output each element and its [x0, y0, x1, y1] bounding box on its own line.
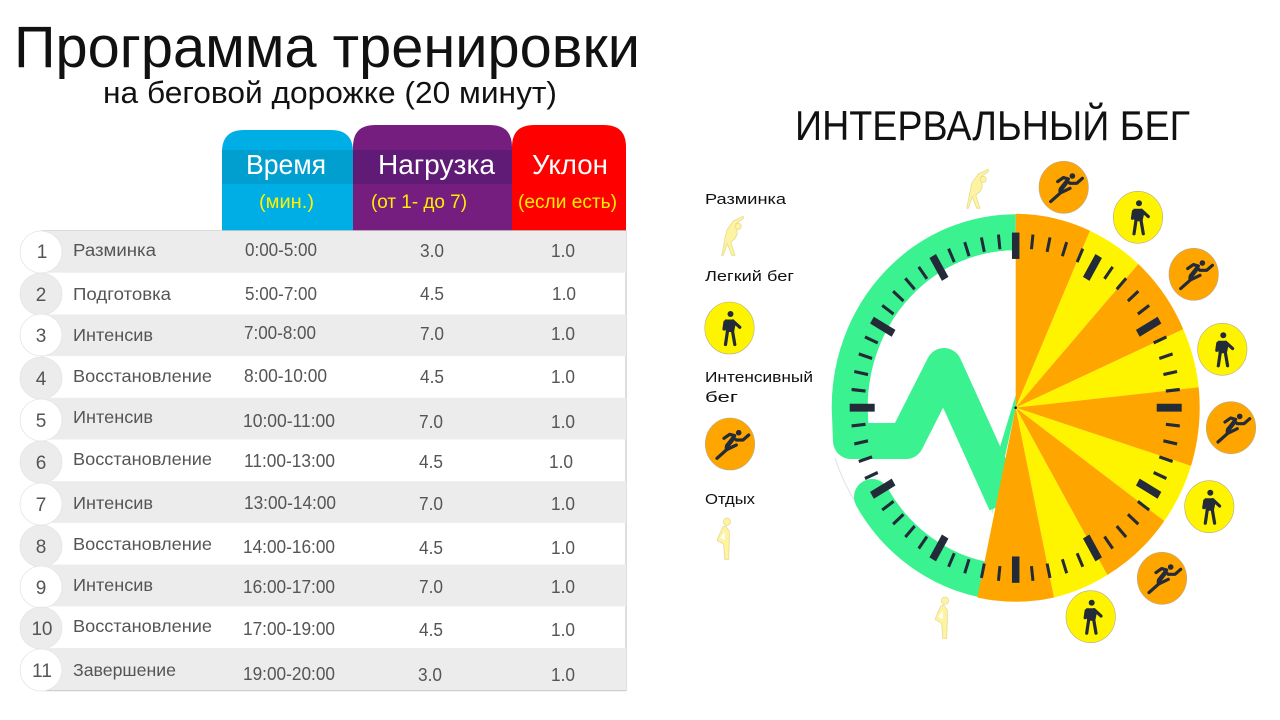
table: training program [20, 125, 626, 691]
row 8: 1.0 [551, 538, 575, 558]
legend: easy run: Легкий бег [705, 268, 795, 285]
row 8: 8 [36, 537, 46, 558]
row 7: 1.0 [551, 494, 575, 514]
row 3: Интенсив [73, 325, 153, 345]
row 9: 7.0 [419, 577, 443, 597]
column header: time: Время [246, 149, 326, 180]
row 8: 14:00-16:00 [243, 537, 335, 557]
row 4: 4.5 [420, 367, 444, 387]
row 10: 10 [32, 619, 52, 640]
column header: time [222, 130, 353, 231]
row 2: 2 [36, 285, 46, 306]
icon: rest figure [935, 597, 949, 638]
column header: load [353, 125, 512, 231]
row 6: 11:00-13:00 [244, 451, 335, 471]
row 1: Разминка [73, 240, 156, 260]
icon: easy run 2 [1198, 323, 1247, 375]
row 6: 4.5 [419, 452, 443, 472]
row 3: 3 [36, 326, 46, 347]
column header: time: (мин.) [259, 192, 314, 213]
row 11: Завершение [73, 660, 176, 680]
row 7: 13:00-14:00 [244, 493, 336, 513]
clock chart [835, 214, 1200, 602]
row 7: 7 [36, 495, 46, 516]
legend: rest [705, 491, 756, 559]
dial centre [1014, 406, 1017, 409]
row 8: 4.5 [419, 538, 443, 558]
legend: warm-up: Разминка [705, 191, 787, 208]
row 11: 19:00-20:00 [243, 664, 335, 684]
row 2: 5:00-7:00 [245, 284, 317, 304]
row 5: 5 [36, 411, 46, 432]
row 9: 16:00-17:00 [243, 577, 335, 597]
row 4 [20, 357, 575, 399]
row 5: 1.0 [551, 412, 575, 432]
icon: easy run 3 [1185, 481, 1234, 533]
row 4: 1.0 [551, 367, 575, 387]
dial wedges [977, 214, 1200, 602]
icon: intensive run 3 [1206, 402, 1256, 454]
row 9: 9 [36, 578, 46, 599]
row 2 [20, 273, 576, 315]
row 9 [20, 565, 626, 608]
column header: load: Нагрузка [378, 149, 496, 180]
row 7: Интенсив [73, 493, 153, 513]
row 2: Подготовка [73, 284, 171, 304]
row 10 [20, 607, 575, 649]
row 5: 7.0 [419, 412, 443, 432]
icon: easy run 4 [1066, 591, 1115, 643]
green warm-up and rest track [850, 232, 1016, 582]
legend: intensive run [705, 369, 813, 470]
row 10: 17:00-19:00 [243, 619, 335, 639]
icon: intensive run 2 [1169, 248, 1218, 300]
legend [705, 191, 813, 559]
heading: interval running: ИНТЕРВАЛЬНЫЙ БЕГ [795, 101, 1190, 149]
row 1 [20, 231, 626, 273]
row 4: Восстановление [73, 366, 212, 386]
column header: incline: (если есть) [518, 192, 617, 213]
row 7: 7.0 [419, 494, 443, 514]
icon: intensive run 1 [1039, 161, 1088, 213]
legend: rest: Отдых [705, 491, 756, 508]
row 3: 7.0 [420, 324, 444, 344]
row 11: 11 [32, 661, 52, 682]
title: Программа тренировки [14, 15, 640, 80]
row 1: 0:00-5:00 [245, 240, 317, 260]
legend: intensive run: бег [705, 389, 739, 406]
icon: intensive run 4 [1137, 552, 1187, 604]
dial ticks [850, 233, 1182, 583]
row 1: 3.0 [420, 241, 444, 261]
column header: incline: Уклон [532, 149, 608, 180]
row 11: 3.0 [418, 665, 442, 685]
row 3: 1.0 [551, 324, 575, 344]
row 5: 10:00-11:00 [243, 411, 335, 431]
row 3 [20, 314, 626, 356]
row 11: 1.0 [551, 665, 575, 685]
column header: load: (от 1- до 7) [371, 192, 467, 213]
row 2: 1.0 [552, 284, 576, 304]
row 9: Интенсив [73, 575, 153, 595]
subtitle: на беговой дорожке (20 минут) [103, 75, 557, 110]
icon: easy run 1 [1113, 191, 1163, 243]
legend: easy run [705, 268, 795, 354]
row 1: 1 [37, 242, 47, 263]
row 10: 4.5 [419, 620, 443, 640]
row 6: Восстановление [73, 449, 212, 469]
row 8: Восстановление [73, 534, 212, 554]
row 5 [20, 398, 626, 441]
row 6 [20, 441, 573, 483]
table body background [42, 231, 626, 690]
icon: warm-up figure [967, 169, 988, 208]
row 6: 6 [36, 453, 46, 474]
row 4: 4 [36, 369, 47, 390]
legend: warm-up [705, 191, 787, 255]
row 10: Восстановление [73, 616, 212, 636]
column header: incline [512, 125, 626, 231]
legend: intensive run: Интенсивный [705, 369, 813, 386]
row 1: 1.0 [551, 241, 575, 261]
row 6: 1.0 [549, 452, 573, 472]
row 11 [20, 648, 626, 691]
row 9: 1.0 [551, 577, 575, 597]
row 10: 1.0 [551, 620, 575, 640]
row 2: 4.5 [420, 284, 444, 304]
row 3: 7:00-8:00 [244, 323, 316, 343]
row 7 [20, 481, 626, 525]
row 8 [20, 525, 575, 567]
row 5: Интенсив [73, 407, 153, 427]
table header [222, 125, 626, 231]
row 4: 8:00-10:00 [244, 366, 327, 386]
